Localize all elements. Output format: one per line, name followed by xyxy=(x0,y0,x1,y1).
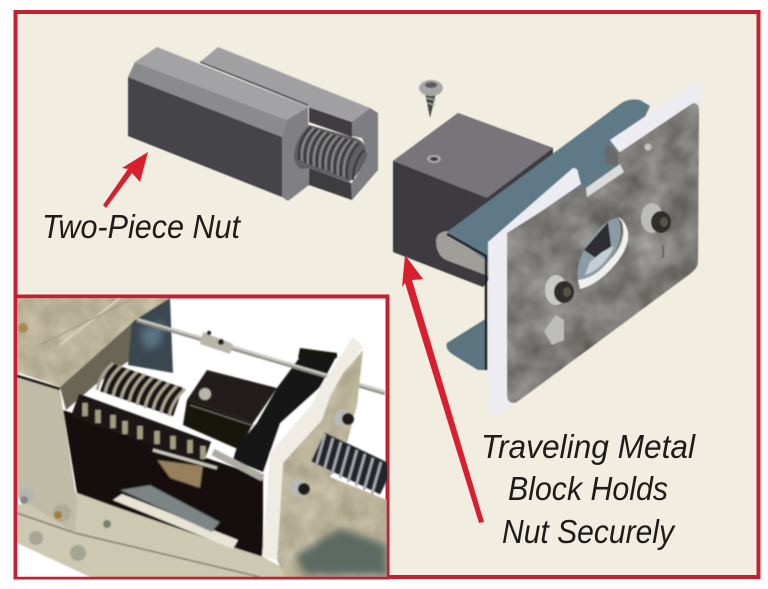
rod collar xyxy=(200,332,233,354)
centre bore xyxy=(578,217,628,289)
plate bolts xyxy=(334,409,352,427)
pin through block xyxy=(436,231,488,276)
inset photo panel xyxy=(16,296,388,578)
bracket lower flange xyxy=(447,318,487,370)
metal block xyxy=(393,113,553,287)
arrow: to two-piece nut xyxy=(103,152,148,208)
piston rod xyxy=(213,452,263,478)
threaded bore xyxy=(294,125,367,182)
channel inner wall xyxy=(128,298,173,373)
rail bolts xyxy=(53,504,71,522)
bracket upper flange xyxy=(447,100,650,262)
label: traveling metal block: Traveling Metal xyxy=(481,428,697,465)
label: traveling metal block xyxy=(481,428,697,550)
rail highlights xyxy=(113,494,238,549)
rail right section xyxy=(277,477,387,577)
main spring xyxy=(97,363,185,416)
photo of nut assembly in operator xyxy=(17,298,387,577)
drive chain xyxy=(75,403,217,468)
label: traveling metal block: Nut Securely xyxy=(502,513,676,550)
black traveling block xyxy=(183,348,337,472)
front nut half xyxy=(128,47,309,201)
galvanized metal plate xyxy=(507,103,699,403)
rear nut half xyxy=(200,47,378,200)
icon: screw xyxy=(419,80,443,118)
white plate edge xyxy=(262,337,363,560)
white backing plate left strip xyxy=(488,168,581,415)
icon: traveling metal block and mounting plate xyxy=(393,83,701,415)
right metal plate xyxy=(277,350,363,560)
channel underside xyxy=(60,320,135,410)
label: two-piece nut: Two-Piece Nut xyxy=(42,208,242,245)
right spring xyxy=(316,434,387,494)
label: traveling metal block: Block Holds xyxy=(508,470,668,507)
plate notch xyxy=(586,144,663,258)
interior of rail xyxy=(63,410,263,557)
white backing plate top strip xyxy=(610,83,701,153)
bottom white corner xyxy=(17,543,90,577)
threaded rod xyxy=(137,320,385,393)
left end plate xyxy=(17,378,77,533)
arrow: to traveling block xyxy=(402,255,484,523)
mounting bolts xyxy=(544,203,671,345)
bottom rail xyxy=(17,493,300,577)
upper metal channel xyxy=(17,298,170,387)
icon: two-piece threaded nut xyxy=(128,47,378,201)
